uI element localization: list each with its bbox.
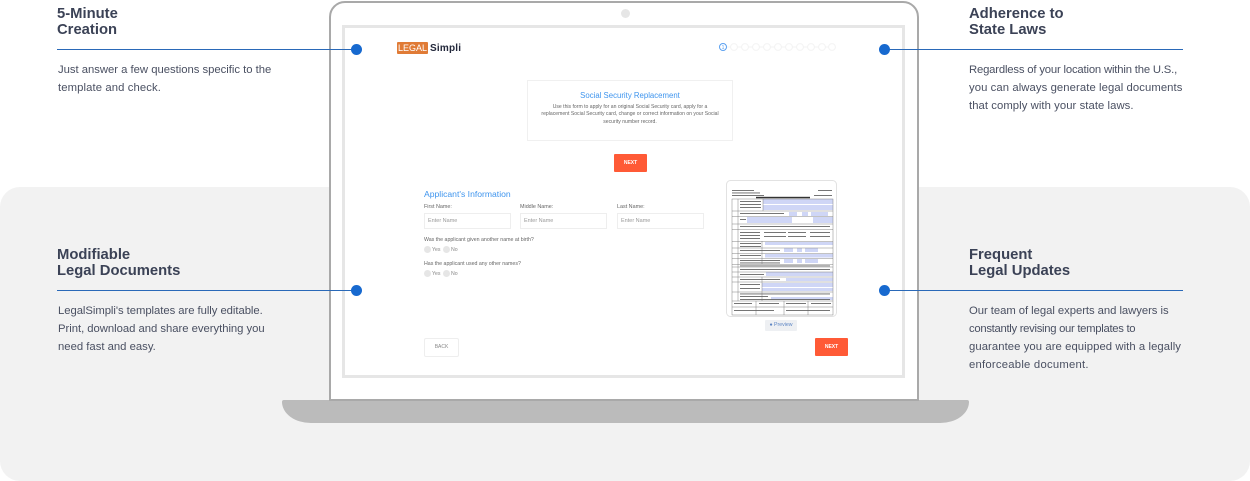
- heading: State Laws: [969, 22, 1046, 38]
- card title: Social Security Replacement: [580, 91, 680, 100]
- next button top: NEXT: [624, 160, 637, 166]
- laptop body: [329, 1, 919, 401]
- card description: [541, 104, 719, 125]
- text: Our team of legal experts and lawyers is: [969, 305, 1169, 317]
- preview button: ● Preview: [769, 322, 793, 328]
- card description: security number record.: [603, 119, 657, 125]
- next button bottom: [815, 338, 848, 356]
- text: [969, 64, 1182, 112]
- screen content: Last Name:: [617, 204, 645, 210]
- heading: [57, 6, 118, 38]
- name inputs: Enter Name: [428, 218, 457, 224]
- card description: Use this form to apply for an original Social Security card, apply for a: [553, 104, 707, 110]
- dot: [879, 285, 890, 296]
- text: guarantee you are equipped with a legally: [969, 341, 1181, 353]
- text: Regardless of your location within the U.S.,: [969, 64, 1177, 76]
- text: constantly revising our templates to: [969, 323, 1135, 335]
- name labels: First Name:: [424, 204, 452, 210]
- icon: laptop camera: [621, 9, 630, 18]
- text: you can always generate legal documents: [969, 82, 1182, 94]
- dot: [351, 44, 362, 55]
- step indicator: 1: [722, 45, 725, 51]
- document preview: [726, 180, 837, 317]
- back button: BACK: [435, 344, 448, 350]
- next button top: [614, 154, 647, 172]
- next button bottom: NEXT: [825, 344, 838, 350]
- screen content: Yes: [432, 247, 440, 253]
- dot: [879, 44, 890, 55]
- logo: LEGAL: [398, 43, 427, 53]
- text: enforceable document.: [969, 359, 1089, 371]
- screen content: No: [451, 271, 458, 277]
- form heading: Applicant's Information: [424, 189, 511, 199]
- text: LegalSimpli's templates are fully editable.: [58, 305, 263, 317]
- heading: [969, 6, 1064, 38]
- heading: Legal Documents: [57, 263, 180, 279]
- card description: replacement Social Security card, change or correct information on your Social: [541, 111, 719, 117]
- screen content: Yes: [432, 271, 440, 277]
- intro card: [527, 80, 733, 141]
- laptop screen: [342, 25, 905, 378]
- callout: Modifiable Legal Documents: [57, 247, 362, 353]
- heading: Frequent: [969, 247, 1032, 263]
- heading: Legal Updates: [969, 263, 1070, 279]
- logo: Simpli: [430, 43, 461, 54]
- text: [58, 305, 265, 353]
- text: [969, 305, 1181, 371]
- text: [58, 64, 271, 94]
- text: Just answer a few questions specific to the: [58, 64, 271, 76]
- screen content: Enter Name: [621, 218, 650, 224]
- leader line: [57, 290, 356, 291]
- heading: Modifiable: [57, 247, 130, 263]
- text: template and check.: [58, 82, 161, 94]
- text: that comply with your state laws.: [969, 100, 1134, 112]
- name inputs: [424, 213, 511, 229]
- laptop base: [282, 400, 969, 423]
- screen content: No: [451, 247, 458, 253]
- dot: [351, 285, 362, 296]
- heading: [969, 247, 1070, 279]
- callout: Adherence to State Laws: [879, 6, 1183, 112]
- question two: Has the applicant used any other names?: [424, 261, 521, 267]
- callout: Frequent Legal Updates: [879, 247, 1183, 371]
- heading: [57, 247, 180, 279]
- question one: Was the applicant given another name at birth?: [424, 237, 534, 243]
- logo: [397, 42, 461, 54]
- text: need fast and easy.: [58, 341, 156, 353]
- leader line: [884, 290, 1183, 291]
- screen content: Enter Name: [524, 218, 553, 224]
- callout: 5-Minute Creation: [57, 6, 362, 94]
- heading: Creation: [57, 22, 117, 38]
- heading: 5-Minute: [57, 6, 118, 22]
- text: Print, download and share everything you: [58, 323, 265, 335]
- back button: [424, 338, 459, 357]
- preview button: [765, 320, 797, 331]
- screen content: Middle Name:: [520, 204, 553, 210]
- heading: Adherence to: [969, 6, 1064, 22]
- gray background panel: [0, 187, 1250, 481]
- leader line: [57, 49, 356, 50]
- leader line: [884, 49, 1183, 50]
- step indicator: [719, 43, 836, 51]
